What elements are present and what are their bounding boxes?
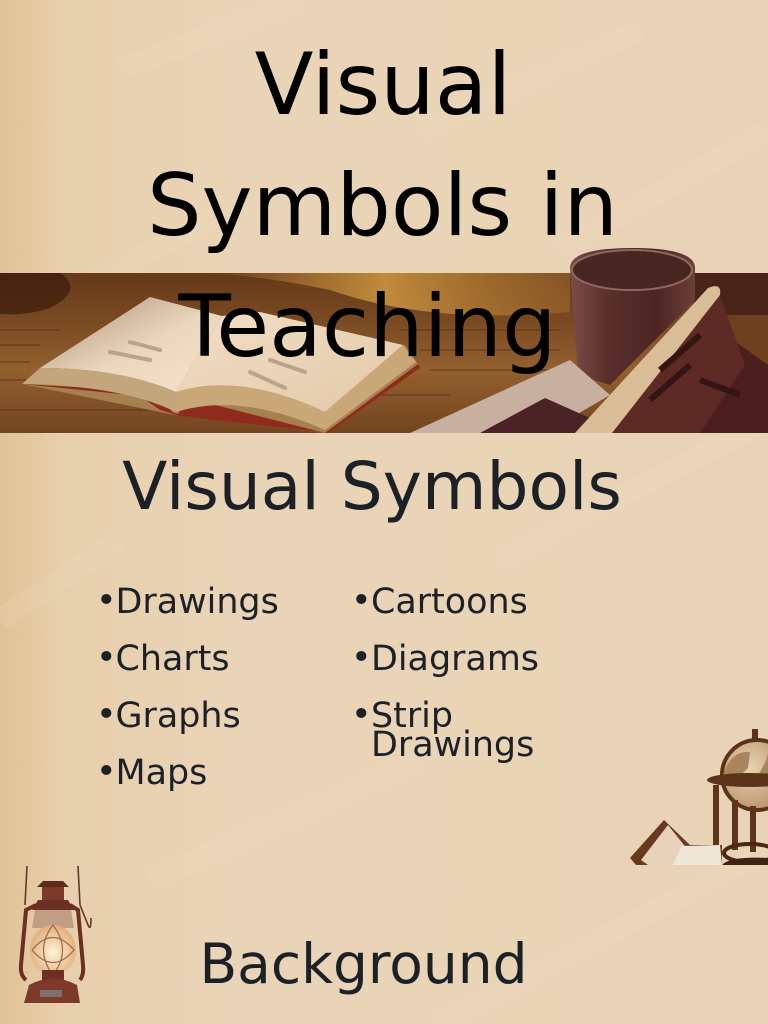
bullet list: right column: • (351, 581, 372, 621)
bullet list: left column: • (96, 695, 117, 735)
bullet list: right column: • (351, 638, 372, 678)
banner open book (22, 297, 420, 433)
bullet list: left column: • (96, 638, 117, 678)
title: Teaching (177, 277, 557, 377)
banner: open book on a wooden desk (0, 248, 768, 433)
bullet list: left column (96, 581, 279, 793)
bullet list: right column (351, 581, 539, 765)
bullet list: right column: • (351, 695, 372, 735)
heading: Visual Symbols: Visual Symbols (122, 448, 622, 525)
banner wood table (0, 273, 768, 433)
bullet list: left column: Charts (116, 639, 230, 679)
bullet list: right column: Cartoons (371, 582, 528, 622)
footer heading: Background: Background (199, 932, 528, 996)
title: Symbols in (147, 156, 618, 256)
bullet list: right column: Diagrams (371, 639, 539, 679)
banner tray and slate (410, 286, 768, 433)
icon: lantern (21, 866, 91, 1003)
bullet list: right column: Strip (371, 696, 453, 736)
bullet list: left column: • (96, 752, 117, 792)
icon: globe and book (630, 729, 768, 865)
bullet list: right column: Drawings (371, 725, 534, 765)
banner cup (570, 248, 695, 385)
title: Visual (255, 35, 511, 135)
bullet list: left column: Maps (116, 753, 207, 793)
bullet list: left column: • (96, 581, 117, 621)
bullet list: left column: Drawings (116, 582, 279, 622)
bullet list: left column: Graphs (116, 696, 241, 736)
title (147, 35, 618, 377)
